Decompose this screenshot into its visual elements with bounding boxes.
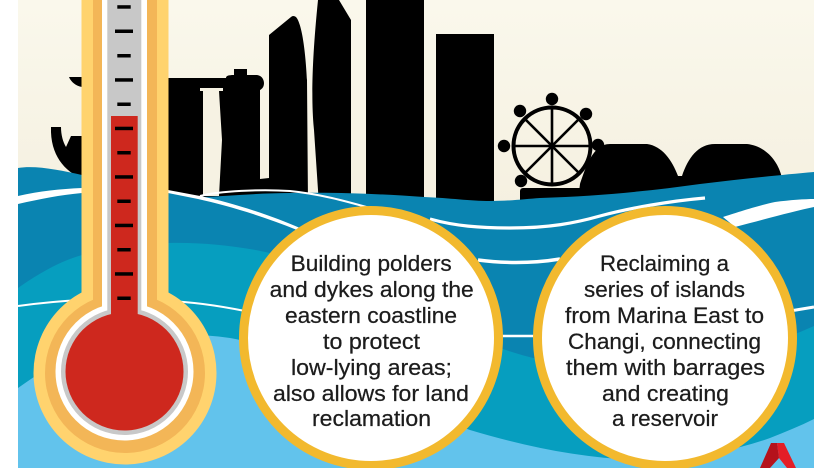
white wave lines upper [18, 188, 814, 262]
thermometer [34, 0, 216, 464]
Marina Bay Sands pillar gap [200, 88, 223, 196]
callout: reclaiming islands [538, 210, 792, 466]
callout text: polders and dykes: eastern coastline [285, 303, 457, 328]
callout text: polders and dykes: low-lying areas; [291, 355, 452, 380]
callout text: reclaiming islands: a reservoir [612, 406, 718, 431]
callout text: reclaiming islands: Changi, connecting [568, 329, 761, 354]
sea: light blue wave [18, 335, 814, 468]
tall tower [366, 0, 424, 205]
callout text: reclaiming islands: Reclaiming a [600, 251, 730, 276]
outer yellow casing [34, 0, 216, 464]
ferris wheel [498, 93, 810, 208]
esplanade domes [578, 144, 782, 200]
callout text: polders and dykes: to protect [323, 329, 420, 354]
grey glass [61, 0, 188, 435]
callout text: polders and dykes: reclamation [312, 406, 431, 431]
Marina Bay Sands and towers [168, 0, 351, 205]
callout text: polders and dykes: Building polders [291, 251, 452, 276]
callout text: reclaiming islands: and creating [602, 381, 729, 406]
merlion silhouette [51, 77, 82, 178]
rectangular tower [436, 34, 494, 206]
callout text: reclaiming islands: them with barrages [566, 355, 765, 380]
callout text: reclaiming islands: series of islands [584, 277, 745, 302]
callout text: reclaiming islands: from Marina East to [565, 303, 764, 328]
sea: dark wave [18, 167, 814, 468]
Singapore skyline silhouette [51, 0, 810, 208]
callout text: polders and dykes [270, 251, 474, 431]
scale ticks [115, 5, 133, 300]
sea: teal wave [18, 243, 814, 468]
callout text: reclaiming islands [565, 251, 765, 431]
white inner [56, 0, 194, 440]
red mercury [66, 116, 184, 430]
orange casing [45, 0, 205, 453]
sky background [18, 0, 814, 210]
logo: red A mark [760, 443, 796, 468]
white wave lines lower [18, 300, 814, 336]
callout text: polders and dykes: also allows for land [273, 381, 469, 406]
callout: polders and dykes [244, 210, 498, 466]
callout text: polders and dykes: and dykes along the [270, 277, 474, 302]
